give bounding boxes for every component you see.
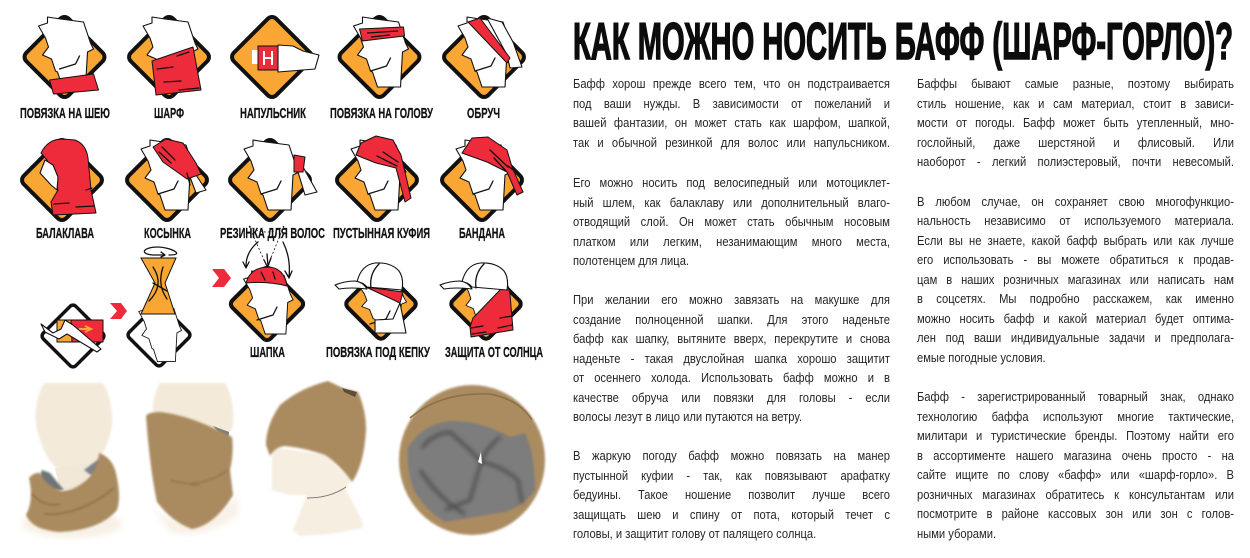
icon: wristband: [230, 15, 319, 99]
icon: twisted gaiter on head: [126, 247, 192, 368]
label: neck gaiter: ПОВЯЗКА НА ШЕЮ: [20, 105, 110, 122]
red neck band: [50, 74, 98, 94]
red band: [258, 46, 278, 70]
text block: left paragraph 4: [573, 448, 890, 541]
text block: left paragraph 1: так и обычной резинкой для волос или напульсником.: [573, 135, 890, 150]
text block: right paragraph 2: в соцсетях. Мы подробно расскажем, как именно: [917, 291, 1234, 306]
text block: right paragraph 2: его использовать - вы можете обратиться к продав-: [917, 252, 1234, 267]
dashed pull lines: [249, 226, 284, 260]
brown hat: [266, 381, 366, 482]
cap: [357, 263, 403, 290]
icon: desert keffiyeh: [335, 136, 419, 222]
text block: right paragraph 1: [917, 76, 1234, 169]
photo: gaiter top view: [399, 385, 545, 535]
icon: kerchief: [125, 138, 209, 222]
arrow: first chevron: [110, 303, 127, 319]
red bandana: [462, 137, 523, 195]
text block: left paragraph 3: бафф как шапку, вытяните вверх, перекрутите и снова: [573, 331, 890, 346]
text block: right paragraph 2: В любом случае, он сохраняет свою многофункцио-: [917, 194, 1234, 208]
text block: right paragraph 1: мости от погоды. Бафф может быть утепленный, мно-: [917, 115, 1234, 130]
mannequin head: [36, 383, 112, 472]
icon: hat: [229, 226, 305, 342]
interior folds: [420, 432, 522, 514]
text block: right paragraph 2: можно носить бафф и какой материал будет оптима-: [917, 311, 1234, 326]
text block: right paragraph 1: Баффы бывают самые разные, поэтому выбирать: [917, 76, 1234, 91]
text block: right paragraph 1: наоборот - легкий полиэстеровый, почти невесомый.: [917, 154, 1234, 169]
text block: left paragraph 2: полотенцем для лица.: [573, 253, 689, 268]
label: kerchief: КОСЫНКА: [144, 225, 191, 242]
text block: left paragraph 3: [573, 292, 890, 424]
mannequin: [272, 447, 363, 536]
icon: band under cap: [335, 263, 418, 341]
text block: left paragraph 1: под ваши нужды. В зависимости от пожеланий и: [573, 96, 890, 111]
text block: left paragraph 3: При желании его можно завязать на макушке для: [573, 292, 890, 307]
text block: right paragraph 2: цам в наших розничных магазинах или написать нам: [917, 272, 1234, 287]
cap: [462, 263, 508, 290]
icon: hairband: [442, 15, 526, 99]
label: scarf: ШАРФ: [154, 105, 184, 122]
arrow: right: [283, 242, 292, 278]
text block: left paragraph 2: Его можно носить под велосипедный или мотоциклет-: [573, 175, 890, 190]
text block: left paragraph 3: наденьте - такая двуслойная шапка хорошо защитит: [573, 351, 890, 366]
text block: right paragraph 2: нальность независимо от используемого материала.: [917, 213, 1234, 228]
white ponytail: [298, 167, 317, 195]
text block: right paragraph 3: розничных магазинах обратитесь к консультантам или: [917, 487, 1234, 502]
white tail: [487, 18, 522, 68]
red band: [366, 287, 403, 303]
red kerchief: [153, 139, 201, 179]
yellow arrow: [79, 326, 91, 332]
text block: right paragraph 3: сайте ищите по слову «бафф» или «шарф-горло». В: [917, 467, 1234, 482]
text block: right paragraph 3: технологию баффа используют многие тактические,: [917, 409, 1234, 424]
photo: gaiter worn on neck: [22, 383, 122, 538]
text block: left paragraph 3: создание полноценной шапки. Для этого наденьте: [573, 312, 890, 327]
text block: left paragraph 3: от осеннего холода. Использовать бафф можно и в: [573, 370, 890, 385]
label: hat: ШАПКА: [250, 344, 285, 361]
face opening: [40, 160, 58, 190]
orange fold: [57, 320, 72, 342]
twisted orange gaiter: [141, 258, 176, 314]
text block: left paragraph 4: пустынной куфии - так, как повязывают арафатку: [573, 468, 890, 483]
rotation arrow: [144, 247, 177, 257]
cap visor: [335, 281, 367, 289]
text block: right paragraph 2: лен под ваши индивидуальные задачи и предполага-: [917, 330, 1234, 345]
label: balaclava: БАЛАКЛАВА: [36, 225, 94, 242]
text block: left paragraph 4: бедуины. Такое ношение позволит лучше всего: [573, 487, 890, 502]
text block: right paragraph 3: в ассортименте нашего магазина очень просто - на: [917, 448, 1234, 463]
text block: left paragraph 2: платком или легким, незанимающим много места,: [573, 234, 890, 249]
red keffiyeh: [356, 136, 411, 202]
text block: right paragraph 2: емые погодные условия.: [917, 350, 1046, 365]
text block: right paragraph 1: стиль ношение, как и сам материал, стоит в зависи-: [917, 96, 1234, 111]
text block: left paragraph 1: Бафф хорош прежде всего тем, что он подстраивается: [573, 76, 890, 91]
text block: left paragraph 3: качестве обруча или повязки для головы - если: [573, 390, 890, 405]
text block: right paragraph 3: милитари и туристические бренды. Поэтому найти его: [917, 428, 1234, 443]
grey lining: [213, 426, 229, 442]
white tail: [190, 172, 206, 193]
grey lining: [37, 470, 64, 491]
brown rim: [399, 385, 545, 535]
neck flap: [375, 303, 406, 333]
text block: right paragraph 2: Если вы не знаете, какой бафф выбрать или как лучше: [917, 233, 1234, 248]
grey interior: [408, 421, 535, 522]
icon: head band: [337, 15, 422, 99]
icon: hair tie: [228, 138, 317, 222]
text block: right paragraph 3: ными уборами.: [917, 526, 996, 541]
icon: bandana: [440, 137, 524, 222]
brown gaiter: [146, 412, 233, 529]
cap visor: [440, 281, 472, 289]
text block: left paragraph 1: [573, 76, 890, 150]
text block: left paragraph 2: отводящий слой. Он может стать обычным носовым: [573, 214, 890, 229]
text block: left paragraph 1: вашей фантазии, он может стать как шарфом, шапкой,: [573, 115, 890, 130]
text block: left paragraph 2: [573, 175, 890, 268]
red band: [360, 27, 404, 41]
label: desert keffiyeh: ПУСТЫННАЯ КУФИЯ: [333, 225, 430, 242]
label: wristband: НАПУЛЬСНИК: [240, 105, 307, 122]
text block: left paragraph 2: ный шлем, как балаклаву или дополнительный влаго-: [573, 195, 890, 210]
text block: left paragraph 4: В жаркую погоду бафф можно повязать на манер: [573, 448, 890, 463]
brown neck gaiter: [26, 453, 119, 532]
icon: folding step one: [40, 303, 106, 369]
photo: worn as hat: [266, 381, 366, 536]
illustration panel: ways to wear: [20, 15, 546, 539]
label: bandana: БАНДАНА: [459, 225, 505, 242]
text block: left paragraph 4: головы, и защитит голову от палящего солнца.: [573, 526, 816, 541]
red scarf: [152, 47, 201, 95]
red balaclava: [41, 139, 96, 215]
text block: right paragraph 2: [917, 194, 1234, 365]
wrist: [252, 50, 260, 64]
icon: neck gaiter: [22, 15, 107, 99]
text block: left paragraph 3: волосы лезут в лицо или путаются на ветру.: [573, 409, 802, 424]
text block: right paragraph 3: посмотрите в районе кассовых зон или зон с голов-: [917, 506, 1234, 521]
arrow: second chevron: [212, 269, 231, 287]
hand: [278, 45, 319, 72]
label: head band: ПОВЯЗКА НА ГОЛОВУ: [330, 105, 433, 122]
red cap: [246, 267, 287, 286]
icon: balaclava: [20, 138, 104, 222]
text block: right paragraph 3: [917, 389, 1234, 541]
mannequin head: [153, 383, 233, 436]
label: hair tie: РЕЗИНКА ДЛЯ ВОЛОС: [220, 225, 325, 242]
text block: left paragraph 4: защищать шею и спину от пота, который течет с: [573, 507, 890, 522]
twist: [264, 254, 271, 266]
text block: right paragraph 3: Бафф - зарегистрированный товарный знак, однако: [917, 389, 1234, 404]
mannequin neck: [55, 462, 98, 490]
label: hairband: ОБРУЧ: [467, 105, 500, 122]
photo: gaiter pulled over face: [146, 383, 238, 534]
red band: [468, 18, 510, 63]
icon: sun protection: [440, 263, 523, 341]
arrow: left: [243, 242, 258, 268]
red neck cover: [470, 275, 513, 337]
arm: [41, 320, 101, 352]
text block: right paragraph 1: гослойный, даже шерстяной и флисовый. Или: [917, 135, 1234, 150]
red hair tie: [294, 155, 305, 172]
label: band under cap: ПОВЯЗКА ПОД КЕПКУ: [326, 344, 430, 361]
folded red cloth: [70, 320, 103, 342]
icon: scarf: [127, 15, 211, 99]
